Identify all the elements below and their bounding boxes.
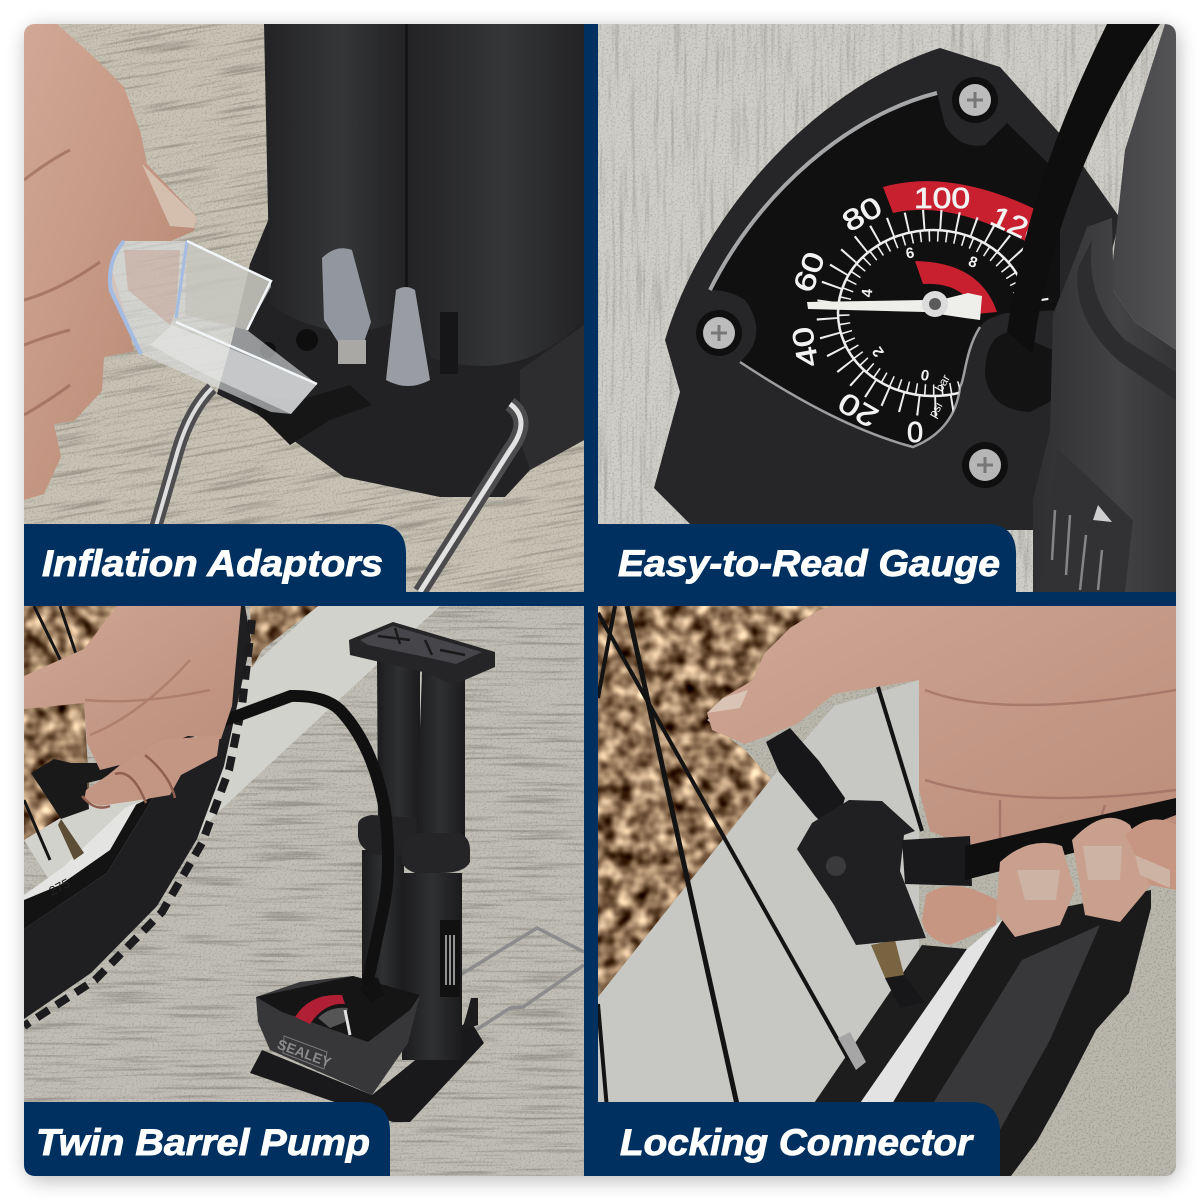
- screw left: [696, 310, 742, 356]
- dial numbers: 60: [788, 248, 832, 297]
- photo: handle: [349, 622, 495, 685]
- photo: hand: [24, 606, 241, 808]
- photo: rim white band: [856, 919, 1003, 1109]
- panel: easy-to-read gauge: [598, 24, 1176, 592]
- photo: wire stand: [460, 928, 584, 1032]
- heading: Locking Connector: [620, 1122, 975, 1163]
- dial numbers: psi: [926, 400, 945, 420]
- photo: fingers: [922, 818, 1176, 945]
- screw top: [952, 77, 998, 123]
- photo: wheel rim dark: [810, 945, 967, 1109]
- photo: concrete ground: [24, 24, 584, 592]
- pump barrel: [1033, 24, 1176, 592]
- photo: valve stem: [871, 940, 924, 1008]
- photo: gravel: [598, 606, 858, 1006]
- photo: connector sleeve: [902, 836, 972, 886]
- dial numbers: 40: [787, 324, 825, 369]
- photo: bicycle rim: 275: [46, 875, 73, 899]
- photo: tyre sidewall: [932, 925, 1100, 1130]
- photo: gravel: [24, 606, 324, 846]
- photo: spoke nipple: [838, 1032, 866, 1070]
- label: easy-to-read gauge: [598, 524, 1016, 592]
- red psi band: [883, 181, 1037, 242]
- photo: chrome wire right: [420, 404, 521, 592]
- panel: inflation adaptors: [24, 24, 584, 592]
- hose: [1007, 24, 1160, 354]
- photo: gauge housing: [665, 48, 1120, 530]
- screw bottom: [962, 442, 1008, 488]
- photo: pavement: [598, 680, 919, 1176]
- gauge needle: [807, 291, 982, 320]
- photo: grey threaded adaptor: [322, 248, 371, 342]
- dial numbers: 0: [907, 415, 923, 447]
- photo: connector pivot: [826, 856, 846, 876]
- heading: Easy-to-Read Gauge: [618, 543, 1000, 584]
- photo: barrels and collars: [358, 660, 470, 1060]
- dial numbers: 0: [920, 365, 931, 384]
- dial numbers: 2: [869, 343, 888, 360]
- photo: peg and holes: [260, 312, 458, 374]
- photo: spokes: [598, 606, 922, 1109]
- photo: lower base block: [654, 392, 948, 524]
- photo: grey cone adaptor: [386, 287, 430, 386]
- photo: bicycle rim: [24, 796, 154, 929]
- panel: twin barrel pump: [24, 606, 584, 1176]
- dial numbers: 8: [966, 253, 980, 272]
- photo: pump base: [217, 200, 584, 497]
- photo: thumbnail: [707, 690, 748, 713]
- photo: spokes: [24, 606, 77, 861]
- photo: valve connector: [31, 759, 116, 860]
- dial numbers: 20: [833, 385, 884, 433]
- photo: foot peg: [464, 998, 478, 1026]
- dial numbers: 6: [905, 244, 916, 263]
- photo: hand: [24, 24, 197, 500]
- brand plate: SEALEY: [275, 1036, 334, 1070]
- label: inflation adaptors: [24, 524, 406, 592]
- dial ticks and ring: [827, 220, 1039, 406]
- photo: concrete at right: [598, 606, 1176, 1176]
- dial numbers: 100: [914, 183, 970, 215]
- heading: Twin Barrel Pump: [36, 1122, 370, 1163]
- dial numbers: bar: [932, 372, 953, 394]
- red bar band: [915, 261, 997, 314]
- dial numbers: [792, 187, 1028, 443]
- dial numbers: 80: [837, 191, 888, 239]
- lens highlight: [710, 93, 980, 447]
- photo: chrome wire left: [156, 388, 212, 526]
- dial numbers: 4: [859, 287, 876, 298]
- dial numbers: 120: [985, 201, 1050, 253]
- photo: hose: [100, 696, 388, 985]
- photo: connector body: [797, 800, 926, 945]
- photo: light pavement strip: [24, 606, 440, 899]
- photo: connector lever: [766, 728, 845, 835]
- photo: textured pavement: [24, 606, 584, 1176]
- panel: locking connector: [598, 606, 1176, 1176]
- photo: tyre: [880, 890, 1151, 1176]
- heading: Inflation Adaptors: [42, 543, 383, 584]
- label: locking connector: [584, 1102, 1000, 1176]
- photo: hose: [965, 798, 1176, 880]
- photo: gauge face: [712, 94, 1060, 446]
- photo: gauge housing: [256, 976, 420, 1095]
- photo: barrel sticker: [440, 920, 460, 997]
- photo: palm creases: [925, 690, 1176, 840]
- photo: hand: [707, 606, 1176, 860]
- photo: concrete wall: [598, 24, 1176, 592]
- photo: pump base: [250, 1020, 484, 1122]
- hose collar: [985, 332, 1053, 412]
- photo: bicycle tyre: [24, 606, 251, 1019]
- collar: [360, 978, 384, 1002]
- label: twin barrel pump: [24, 1102, 390, 1176]
- photo: tyre tread: [24, 620, 252, 1026]
- photo: twin barrels: [264, 24, 584, 366]
- photo: clear plastic cup: [110, 241, 317, 414]
